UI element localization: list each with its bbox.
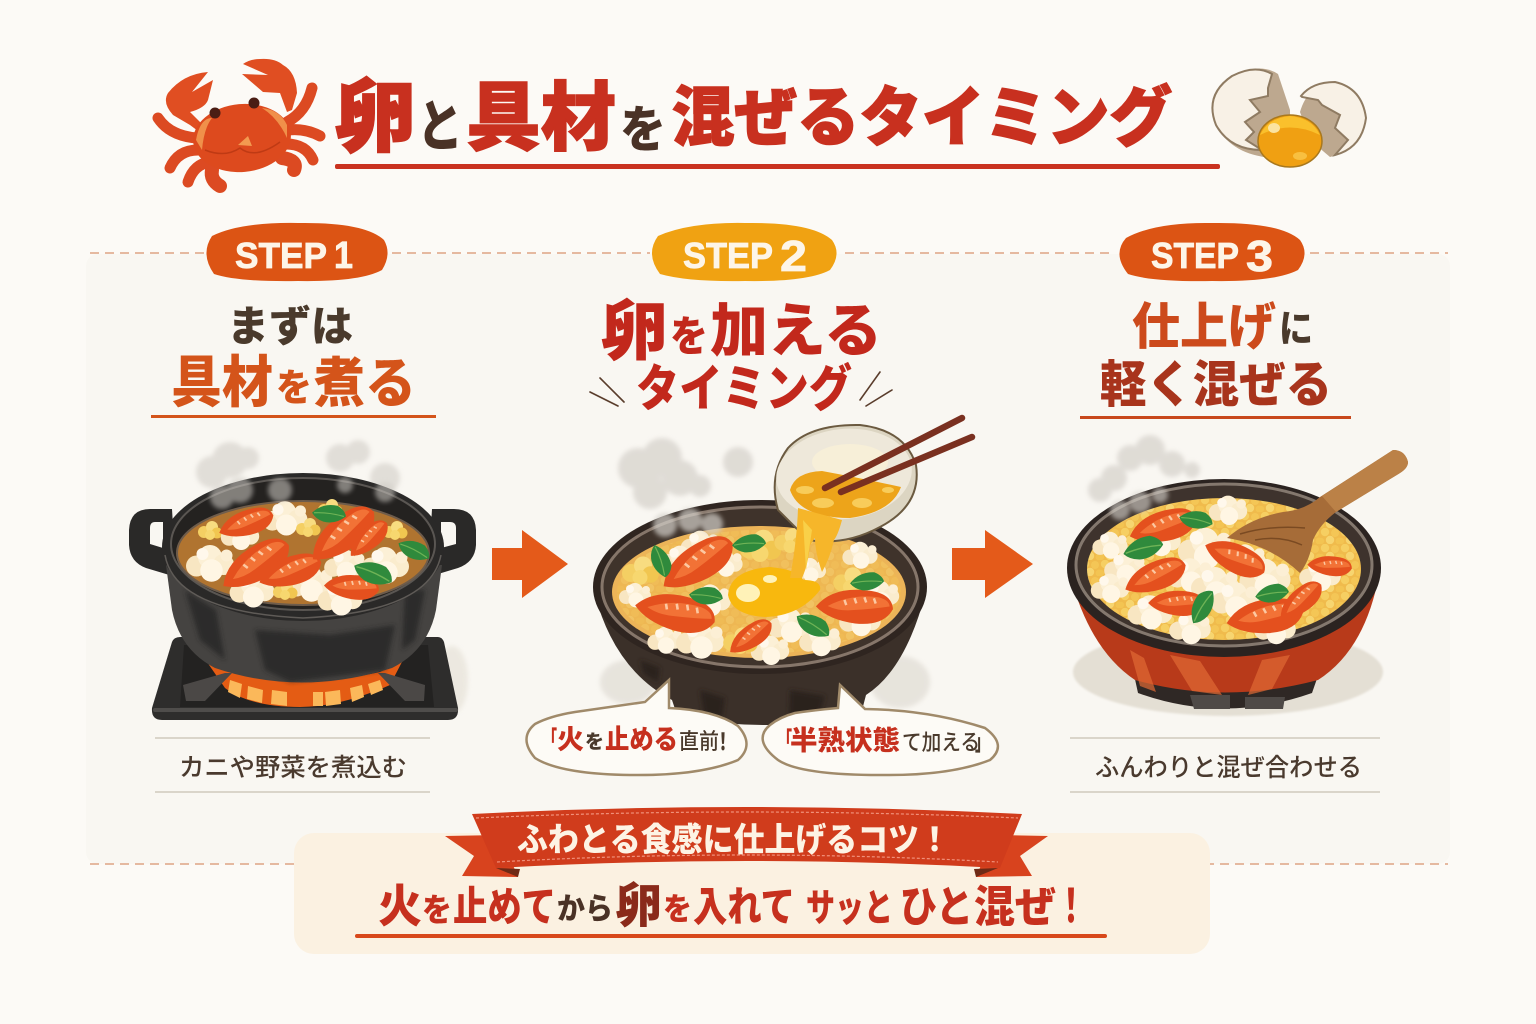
callout: before turning off heat (526, 680, 746, 775)
arrow 2 (952, 530, 1033, 598)
tip text: ！ (1056, 880, 1086, 932)
burner plate (152, 637, 458, 720)
small bowl (772, 422, 917, 541)
title: を (620, 102, 666, 158)
emphasis sparks (590, 372, 892, 406)
callout: before turning off heat: 「 (543, 727, 557, 754)
step 1 heading: 煮る (314, 354, 416, 414)
caption: step 3 (1070, 738, 1380, 792)
callout: before turning off heat: を (585, 731, 604, 753)
steam behind pot (196, 440, 400, 493)
rim (1067, 479, 1381, 657)
step 2 heading (590, 294, 892, 417)
callout: before turning off heat: 止める (605, 725, 678, 755)
step 1 heading (151, 303, 436, 418)
ribbon (445, 807, 1048, 877)
icon: crab (158, 59, 320, 186)
step 1 badge: 1 (334, 235, 353, 277)
base (1133, 670, 1320, 708)
tip underline (355, 934, 1107, 938)
base smudges (600, 660, 656, 704)
callout: soft-set state: 」 (975, 729, 989, 756)
steam on rim (1110, 487, 1168, 520)
step 3 badge (1119, 223, 1305, 281)
title underline (335, 164, 1220, 169)
callout: soft-set state: 「 (778, 728, 792, 755)
step 2 badge: 2 (780, 232, 807, 281)
tip text: を (663, 892, 692, 927)
title: 卵 (334, 73, 416, 162)
illustration: pot on burner (129, 440, 476, 720)
step 1 heading: まずは (227, 303, 353, 350)
bowl body (1070, 575, 1379, 692)
caption: step 3: ふんわりと混ぜ合わせる (1095, 754, 1362, 782)
step 3 heading: 仕上げ (1132, 299, 1276, 355)
steam (618, 438, 753, 509)
step 2 badge (652, 223, 837, 281)
table shadow (1073, 628, 1383, 716)
callout: before turning off heat: ！ (715, 729, 731, 756)
handles (129, 509, 176, 577)
step 1 badge (206, 223, 388, 281)
illustration: bowl with egg (593, 418, 972, 725)
caption: step 1 (155, 738, 430, 792)
pot rim (162, 473, 444, 621)
chopsticks (825, 418, 972, 492)
arrow 1 (492, 530, 568, 598)
food (186, 499, 433, 616)
step 2 heading: 加える (710, 299, 882, 364)
steam on rim (653, 508, 723, 537)
steam over rim (210, 477, 395, 509)
bowl body (595, 595, 925, 725)
tip text: 火 (378, 880, 422, 932)
food (612, 526, 906, 658)
step 1 badge: STEP (235, 235, 327, 276)
title (334, 73, 1172, 162)
step 2 heading: タイミング (636, 361, 852, 417)
tip text: を (422, 892, 452, 928)
tip text: 混ぜ (974, 883, 1056, 932)
tip text: 卵 (615, 880, 662, 933)
icon: cracked egg (1212, 68, 1366, 167)
title: 具材 (466, 76, 616, 160)
step 2 heading: 卵 (600, 294, 668, 368)
steam (1088, 435, 1200, 502)
broth (177, 501, 429, 605)
ribbon: ふわとる食感に仕上げるコツ！ (517, 821, 950, 858)
callout: before turning off heat: 直前 (679, 729, 719, 754)
egg pool (728, 567, 820, 617)
pot body (166, 565, 442, 682)
tip text: から (557, 893, 613, 926)
panel: bottom tip (294, 807, 1210, 954)
tip text: 止めて (453, 884, 556, 930)
flame (207, 660, 403, 707)
tip text: ひと (900, 884, 973, 932)
title: 混ぜるタイミング (672, 81, 1172, 154)
step 2 badge: STEP (683, 235, 773, 276)
tip text (378, 880, 1086, 933)
step 3 badge: 3 (1246, 232, 1273, 281)
rim (593, 500, 927, 674)
step 3 badge: STEP (1151, 235, 1239, 276)
tip text: 入れて (693, 884, 795, 930)
illustration: finished bowl with wooden spoon (1067, 435, 1408, 716)
panel: steps background (86, 253, 1450, 864)
burner smudge (436, 646, 468, 714)
rice (1087, 498, 1361, 640)
step 3 heading: に (1279, 309, 1313, 351)
step 3 heading: 軽く混ぜる (1100, 357, 1332, 413)
callout: before turning off heat: 火 (557, 725, 584, 755)
grate (183, 673, 425, 701)
caption: step 1: カニや野菜を煮込む (179, 754, 407, 782)
egg stream (790, 508, 842, 578)
step 3 heading (1080, 299, 1351, 419)
callout: soft-set state: 半熟状態 (790, 726, 900, 756)
callout: soft-set state: て加える (902, 730, 980, 755)
step 2 heading: を (670, 313, 708, 360)
callout: soft-set state (763, 685, 998, 775)
tip text: サッと (806, 888, 893, 930)
step 1 heading: を (276, 368, 312, 410)
wooden spoon (1227, 450, 1408, 573)
step 1 heading: 具材 (171, 351, 273, 414)
title: と (417, 95, 463, 158)
